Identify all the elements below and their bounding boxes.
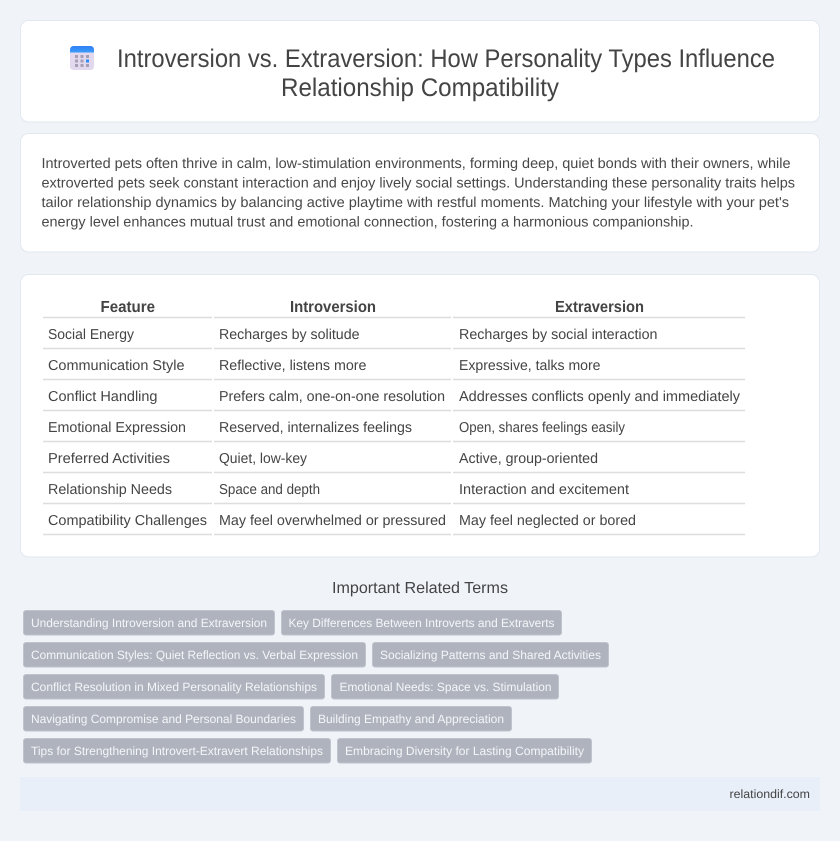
row: Compatibility Challenges: May feel neglected or bored (459, 513, 636, 529)
tag (24, 674, 324, 699)
tag: Building Empathy and Appreciation (318, 712, 504, 726)
row: Conflict Handling: Addresses conflicts openly and immediately (459, 389, 741, 405)
tag (24, 706, 304, 731)
row: Emotional Expression: Reserved, internalizes feelings (219, 420, 412, 436)
title: Introversion vs. Extraversion: How Personality Types Influence (117, 45, 775, 73)
row: Communication Style: Reflective, listens more (219, 358, 366, 374)
tag: Key Differences Between Introverts and Extraverts (288, 616, 554, 630)
tag (282, 610, 562, 635)
row: Social Energy: Recharges by solitude (219, 327, 360, 343)
title (117, 45, 775, 102)
row: Preferred Activities: Quiet, low-key (219, 451, 308, 467)
row: Emotional Expression: Open, shares feelings easily (459, 420, 626, 436)
row: Social Energy (48, 327, 658, 343)
table header: Extraversion (555, 299, 644, 316)
row: Communication Style: Communication Style (48, 358, 184, 374)
panel: comparison table (20, 274, 820, 557)
tag (310, 706, 512, 731)
tag: Conflict Resolution in Mixed Personality Relationships (31, 680, 317, 694)
tag: Understanding Introversion and Extraversion (31, 616, 267, 630)
row: Relationship Needs: Relationship Needs (48, 482, 172, 498)
tag (24, 610, 274, 635)
row: Preferred Activities (48, 451, 598, 467)
panel: intro paragraph: Introverted pets often thrive in calm, low-stimulation environments, forming deep, quiet bonds with their owners, while (42, 156, 790, 172)
row: Communication Style (48, 358, 600, 374)
row: Emotional Expression: Emotional Expression (48, 420, 186, 436)
row: Conflict Handling: Prefers calm, one-on-one resolution (219, 389, 445, 405)
tag: Tips for Strengthening Introvert-Extravert Relationships (31, 744, 323, 758)
panel: intro paragraph: energy level enhances mutual trust and emotional connection, fostering a harmonious companionship. (42, 214, 693, 230)
panel: intro paragraph: extroverted pets seek constant interaction and enjoy lively social settings. Understanding these personality traits helps (42, 176, 795, 192)
tag: Socializing Patterns and Shared Activities (380, 648, 601, 662)
table header: Introversion (290, 299, 376, 316)
heading: related terms: Important Related Terms (332, 580, 508, 597)
panel: intro paragraph (20, 134, 820, 252)
table header: Feature (100, 299, 155, 316)
row: Compatibility Challenges (48, 513, 636, 529)
row: Communication Style: Expressive, talks more (459, 358, 600, 374)
tag group: related terms (24, 610, 608, 763)
row: Relationship Needs (48, 482, 629, 498)
panel: intro paragraph: tailor relationship dynamics by balancing active playtime with restful moments. Matching your lifestyle with your pet's (42, 195, 789, 211)
tag (24, 642, 366, 667)
row: Conflict Handling (48, 389, 741, 405)
row: Preferred Activities: Active, group-oriented (459, 451, 598, 467)
row: Preferred Activities: Preferred Activities (48, 451, 170, 467)
row: Emotional Expression (48, 420, 626, 436)
row: Relationship Needs: Interaction and excitement (459, 482, 629, 498)
row: Compatibility Challenges: Compatibility Challenges (48, 513, 207, 529)
title: Relationship Compatibility (281, 74, 559, 102)
footer (20, 777, 820, 811)
row: Social Energy: Social Energy (48, 327, 135, 343)
table header (100, 299, 644, 316)
row: Compatibility Challenges: May feel overwhelmed or pressured (219, 513, 446, 529)
row: Conflict Handling: Conflict Handling (48, 389, 158, 405)
tag (332, 674, 558, 699)
tag (372, 642, 608, 667)
tag (24, 738, 330, 763)
row: Social Energy: Recharges by social interaction (459, 327, 658, 343)
footer: relationdif.com (730, 787, 810, 801)
icon: calendar (70, 46, 94, 70)
row: Relationship Needs: Space and depth (219, 482, 320, 498)
tag: Communication Styles: Quiet Reflection vs. Verbal Expression (31, 648, 358, 662)
tag: Navigating Compromise and Personal Boundaries (31, 712, 296, 726)
tag (338, 738, 592, 763)
tag: Emotional Needs: Space vs. Stimulation (340, 680, 552, 694)
panel: title card (20, 20, 820, 122)
tag: Embracing Diversity for Lasting Compatibility (345, 744, 584, 758)
